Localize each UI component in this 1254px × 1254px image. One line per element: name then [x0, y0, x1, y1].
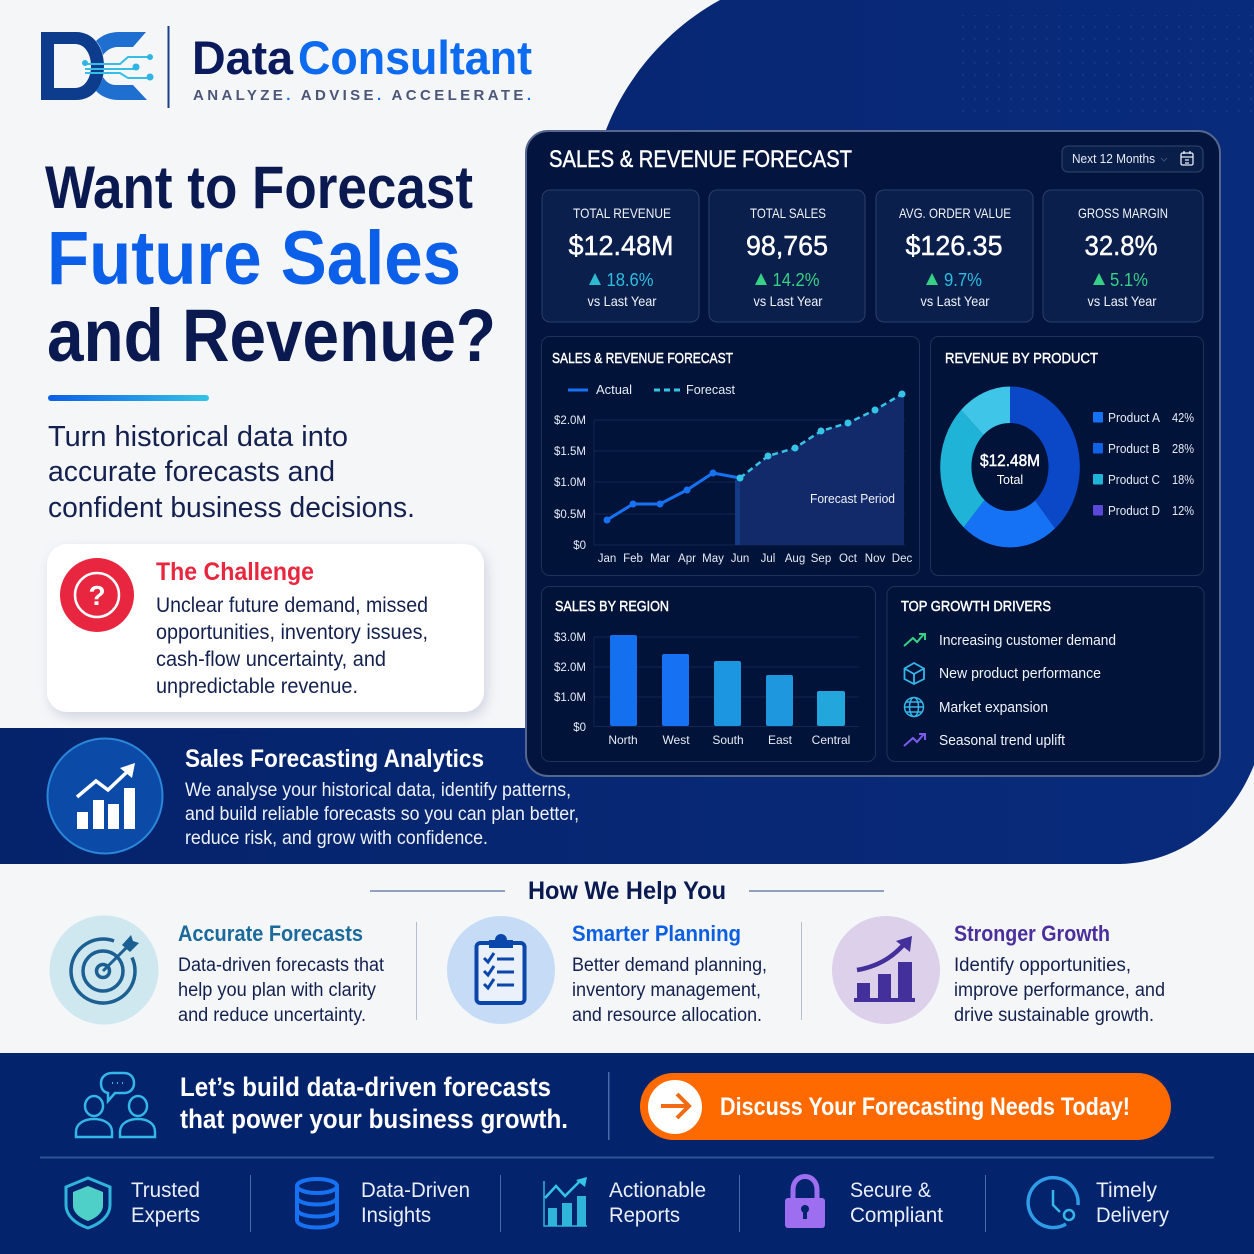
KPI: average order value: $126.35 [906, 230, 1002, 261]
service text: Better demand planning, [572, 955, 767, 976]
icon: analytics chart [48, 738, 162, 854]
headline [45, 154, 496, 377]
service text: help you plan with clarity [178, 980, 376, 1001]
logo mark [41, 32, 154, 100]
y axis: $2.0M [554, 415, 586, 427]
bar chart: North [608, 733, 638, 747]
bar chart: West [662, 733, 690, 747]
growth title: TOP GROWTH DRIVERS [901, 599, 1051, 615]
feature: data-driven insights: Insights [361, 1203, 431, 1227]
service: smarter planning [447, 916, 767, 1026]
KPI: total sales: 14.2% [772, 270, 820, 290]
bar chart [554, 632, 859, 747]
KPI: average order value [876, 190, 1033, 322]
x axis: Oct [839, 553, 858, 565]
feature: actionable reports [544, 1177, 706, 1227]
x axis: Sep [811, 553, 831, 565]
dark blue background shape [0, 0, 1254, 864]
panel: the challenge [47, 544, 484, 712]
feature: secure and compliant: Secure & [850, 1178, 931, 1202]
subheading: accurate forecasts and [48, 456, 335, 488]
bar chart: $3.0M [554, 632, 586, 644]
bar chart: $1.0M [554, 692, 586, 704]
service text: Identify opportunities, [954, 955, 1131, 976]
analytics heading: Sales Forecasting Analytics [185, 745, 484, 773]
subheading [48, 421, 415, 524]
driver: new product: New product performance [939, 666, 1101, 682]
logo: Consultant [298, 31, 532, 84]
x axis: Dec [892, 553, 912, 565]
donut legend: 42% [1172, 411, 1194, 425]
chart legend [568, 382, 735, 397]
service heading: Smarter Planning [572, 921, 741, 946]
chart legend: Actual [596, 382, 632, 397]
KPI: total revenue: 18.6% [606, 270, 654, 290]
KPI: gross margin: vs Last Year [1088, 293, 1157, 309]
panel: dashboard [526, 131, 1220, 776]
feature: secure and compliant [785, 1176, 943, 1228]
how we help heading: How We Help You [528, 877, 726, 905]
service text: inventory management, [572, 980, 761, 1001]
analytics text [185, 779, 579, 849]
KPI: total revenue: $12.48M [568, 230, 674, 261]
analytics text: We analyse your historical data, identify patterns, [185, 779, 571, 801]
feature: data-driven insights: Data-Driven [361, 1178, 470, 1202]
service: stronger growth [832, 916, 1165, 1026]
KPI: total revenue [542, 190, 699, 322]
icon: question mark: ? [88, 580, 106, 611]
headline: and Revenue? [47, 294, 496, 377]
driver: market expansion [904, 698, 1048, 716]
service text [954, 955, 1165, 1026]
panel: top growth drivers [887, 586, 1204, 762]
KPI: total sales: TOTAL SALES [750, 205, 826, 221]
logo divider [168, 26, 170, 108]
chart legend: Forecast [686, 382, 735, 397]
feature: actionable reports: Reports [609, 1203, 680, 1227]
CTA button [640, 1073, 1171, 1140]
feature: timely delivery: Delivery [1096, 1203, 1169, 1227]
date selector: Next 12 Months [1072, 152, 1155, 166]
KPI: gross margin: GROSS MARGIN [1078, 205, 1168, 221]
analytics text: and build reliable forecasts so you can plan better, [185, 803, 579, 825]
driver: seasonal uplift: Seasonal trend uplift [939, 733, 1065, 749]
chart title: SALES & REVENUE FORECAST [552, 350, 733, 367]
dashboard title: SALES & REVENUE FORECAST [549, 146, 852, 173]
feature: trusted experts [66, 1178, 200, 1228]
donut legend [1093, 411, 1194, 518]
CTA button: Discuss Your Forecasting Needs Today! [720, 1093, 1130, 1121]
KPI: total sales: 98,765 [746, 230, 828, 261]
panel: revenue by product [930, 336, 1204, 576]
forecast area [735, 393, 904, 545]
analytics text: reduce risk, and grow with confidence. [185, 827, 488, 849]
x axis: Jun [731, 553, 749, 565]
challenge text: opportunities, inventory issues, [156, 621, 428, 644]
icon: people conversation [76, 1073, 155, 1137]
feature: trusted experts: Experts [131, 1203, 200, 1227]
KPI: average order value: vs Last Year [920, 293, 990, 309]
panel: sales forecasting analytics [48, 738, 579, 854]
x axis: May [702, 553, 724, 565]
call to action text: Let’s build data-driven forecasts [180, 1072, 551, 1102]
x axis [598, 553, 912, 565]
icon: question mark [60, 558, 134, 632]
challenge text: unpredictable revenue. [156, 675, 358, 698]
service text: improve performance, and [954, 980, 1165, 1001]
challenge text [156, 594, 428, 698]
service text [572, 955, 767, 1026]
forecast line [736, 390, 906, 482]
y axis: $1.5M [554, 446, 586, 458]
service text: Data-driven forecasts that [178, 955, 385, 976]
donut legend: 18% [1172, 473, 1194, 487]
service text: and reduce uncertainty. [178, 1005, 366, 1026]
KPI: gross margin: 32.8% [1084, 230, 1158, 261]
driver: new product [904, 663, 1101, 684]
donut legend: 28% [1172, 442, 1194, 456]
panel: sales by region [542, 586, 876, 762]
logo [41, 26, 532, 108]
challenge text: Unclear future demand, missed [156, 594, 428, 617]
x axis: Jan [598, 553, 616, 565]
KPI: total revenue: TOTAL REVENUE [573, 205, 671, 221]
challenge heading: The Challenge [156, 558, 314, 586]
service heading: Stronger Growth [954, 921, 1110, 946]
headline: Want to Forecast [45, 154, 473, 221]
donut chart [940, 386, 1080, 547]
donut total [980, 452, 1040, 487]
driver: customer demand: Increasing customer demand [939, 633, 1116, 649]
date selector [1062, 146, 1203, 172]
x axis: Nov [865, 553, 885, 565]
accent bar [48, 395, 209, 401]
x axis: Apr [678, 553, 696, 565]
forecast period label: Forecast Period [810, 491, 895, 506]
headline: Future Sales [47, 216, 461, 301]
donut legend: Product A [1108, 411, 1161, 425]
footer band [0, 1053, 1254, 1254]
bar chart: $2.0M [554, 662, 586, 674]
actual line [604, 470, 740, 524]
feature: actionable reports: Actionable [609, 1178, 706, 1202]
KPI: gross margin: 5.1% [1110, 270, 1148, 290]
service text: drive sustainable growth. [954, 1005, 1154, 1026]
service text [178, 955, 385, 1026]
KPI: total sales [709, 190, 865, 322]
donut title: REVENUE BY PRODUCT [945, 350, 1098, 367]
subheading: confident business decisions. [48, 492, 415, 524]
subheading: Turn historical data into [48, 421, 348, 453]
feature: trusted experts: Trusted [131, 1178, 200, 1202]
y axis: $0.5M [554, 509, 586, 521]
donut legend: Product B [1108, 442, 1160, 456]
feature: timely delivery [1028, 1178, 1169, 1228]
donut total: Total [997, 473, 1023, 487]
KPI: total revenue: vs Last Year [588, 293, 657, 309]
donut legend: 12% [1172, 504, 1194, 518]
donut total: $12.48M [980, 452, 1040, 470]
brand name: Data [192, 31, 294, 84]
x axis: Mar [650, 553, 670, 565]
service heading: Accurate Forecasts [178, 921, 363, 946]
icon: growth chart [832, 916, 940, 1024]
KPI: average order value: AVG. ORDER VALUE [899, 205, 1011, 221]
donut legend: Product C [1108, 473, 1160, 487]
feature: data-driven insights [297, 1178, 470, 1228]
x axis: Aug [785, 553, 805, 565]
KPI: total sales: vs Last Year [754, 293, 823, 309]
icon: target [50, 916, 158, 1024]
x axis: Jul [761, 553, 775, 565]
feature: secure and compliant: Compliant [850, 1203, 943, 1227]
y axis: $1.0M [554, 477, 586, 489]
bar chart: East [768, 733, 793, 747]
tagline: ANALYZE. ADVISE. ACCELERATE. [193, 87, 531, 104]
driver: market expansion: Market expansion [939, 700, 1048, 716]
feature: timely delivery: Timely [1096, 1178, 1157, 1202]
KPI: gross margin [1043, 190, 1203, 322]
bar chart: $0 [573, 722, 586, 734]
bar chart: Central [812, 733, 850, 747]
call to action text [180, 1072, 568, 1134]
x axis: Feb [623, 553, 643, 565]
panel: forecast line chart [542, 336, 920, 576]
KPI: average order value: 9.7% [944, 270, 982, 290]
service text: and resource allocation. [572, 1005, 762, 1026]
region title: SALES BY REGION [555, 599, 669, 615]
icon: clipboard [447, 916, 555, 1024]
y axis [554, 415, 586, 552]
call to action text: that power your business growth. [180, 1104, 568, 1134]
challenge text: cash-flow uncertainty, and [156, 648, 386, 671]
donut legend: Product D [1108, 504, 1160, 518]
y axis: $0 [573, 540, 586, 552]
service: accurate forecasts [50, 916, 385, 1026]
bar chart: South [712, 733, 744, 747]
